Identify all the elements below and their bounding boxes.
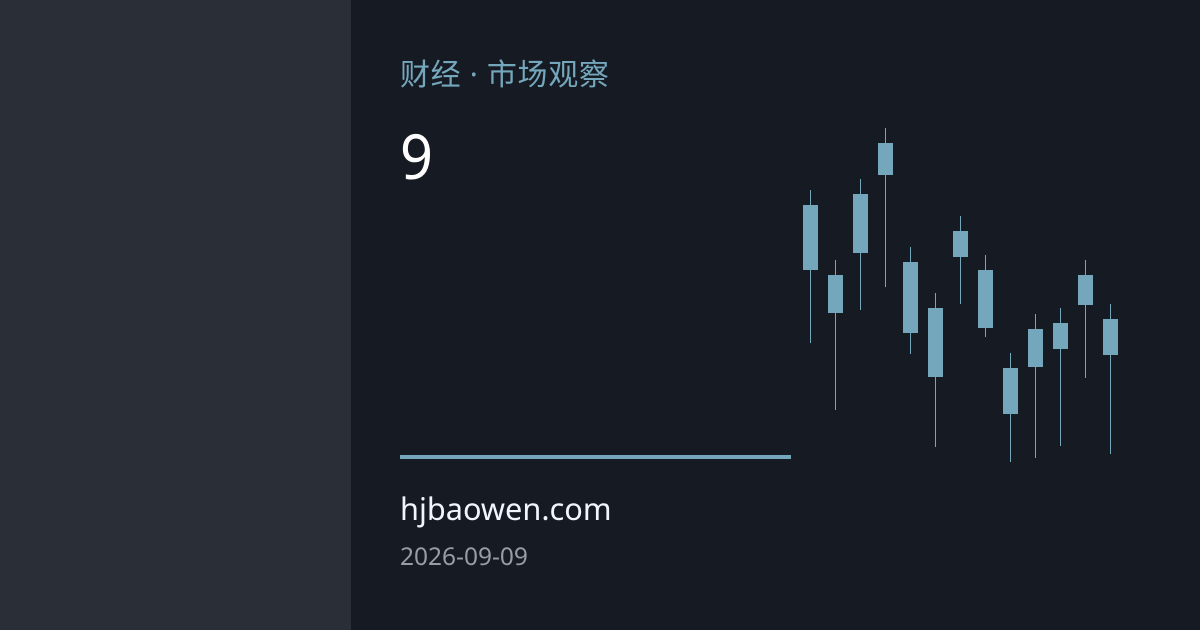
date: 2026-09-09	[400, 539, 528, 573]
site name: hjbaowen.com	[400, 488, 612, 530]
accent rule	[400, 455, 791, 459]
large number: 9	[400, 114, 433, 198]
category heading: 财经 · 市场观察	[400, 53, 610, 94]
panel: left sidebar	[0, 0, 351, 630]
